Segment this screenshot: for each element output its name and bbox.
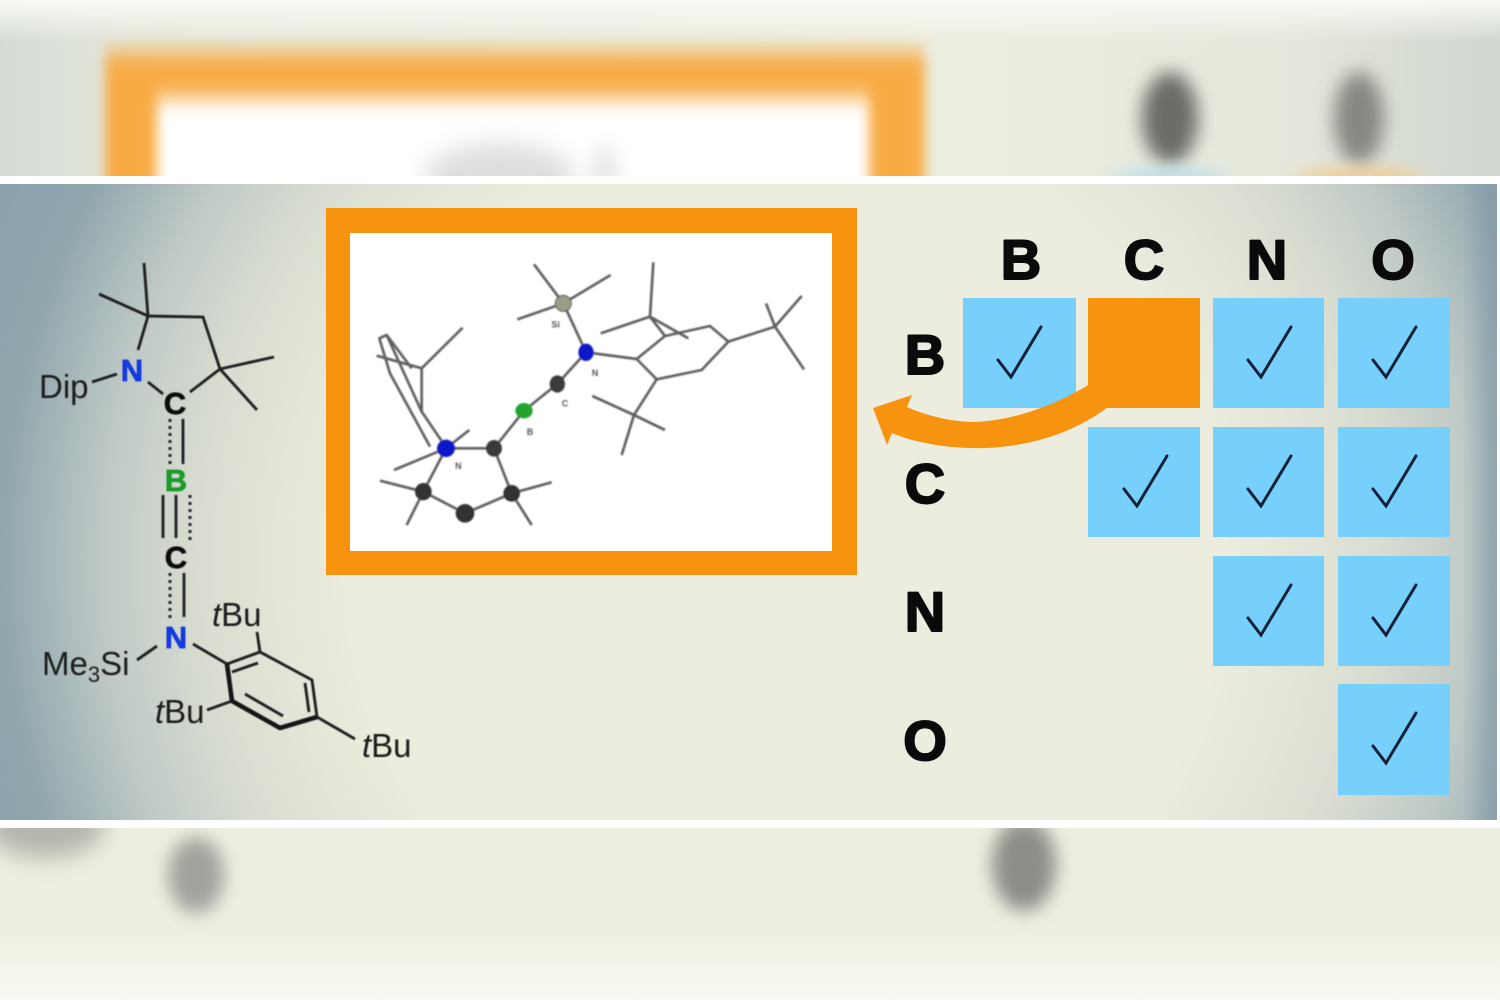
ring and methyl bonds (92, 263, 355, 739)
matrix column headers: O (1371, 228, 1415, 291)
atom labels: N (455, 461, 462, 471)
matrix column headers: N (1247, 228, 1287, 291)
chemical structure diagram (39, 263, 412, 764)
label: Me3Si: 3 (88, 662, 100, 687)
crystal structure model (377, 262, 804, 525)
label: Me3Si: Si (100, 645, 129, 682)
arrow: highlighted cell to crystal structure (873, 384, 1108, 448)
matrix cells (963, 298, 1450, 795)
atom label: bottom N: N (165, 620, 187, 655)
matrix row headers: B (905, 323, 945, 386)
aromatic ring bold edge (227, 664, 317, 728)
matrix row headers: O (903, 709, 947, 772)
atom labels: Si (551, 320, 560, 330)
highlighted cell B-C (1088, 298, 1200, 408)
blurred top band (0, 0, 1500, 176)
matrix row headers: C (905, 452, 945, 515)
matrix row headers: N (905, 580, 945, 643)
matrix column headers: C (1124, 228, 1164, 291)
atom labels: B (527, 427, 534, 437)
atom label: middle C: C (165, 540, 187, 575)
atom label: top N: N (121, 353, 143, 388)
crystal structure frame (326, 208, 857, 575)
main panel background (0, 170, 1500, 840)
label: tBu right: tBu (362, 727, 412, 764)
atom label: B: B (165, 463, 187, 498)
matrix row headers (903, 323, 947, 772)
dotted bonds (170, 419, 190, 618)
matrix column headers: B (1001, 228, 1041, 291)
matrix column headers (1001, 228, 1415, 291)
atom labels: N (592, 368, 598, 378)
label: Dip: Dip (39, 368, 89, 405)
label: tBu top: tBu (212, 596, 262, 633)
atom labels (455, 320, 598, 471)
label: Me3Si: Me (42, 645, 88, 682)
atom labels: C (562, 399, 569, 409)
check marks (998, 327, 1416, 763)
stick bonds (377, 262, 804, 525)
atoms (415, 295, 594, 523)
blurred bottom band (0, 828, 1500, 1000)
label: tBu left: tBu (155, 693, 205, 730)
atom label: top C: C (164, 386, 186, 421)
